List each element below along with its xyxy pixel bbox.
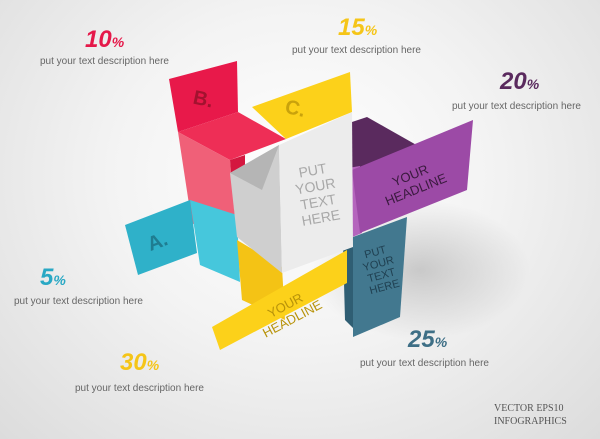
yellow bottom block <box>212 240 347 350</box>
text: 20% <box>500 68 539 95</box>
stat 15% <box>292 14 421 56</box>
text: put your text description here <box>360 358 489 369</box>
purple block: YOUR <box>390 161 430 189</box>
white center box: YOUR <box>294 175 337 197</box>
red block B <box>169 61 286 224</box>
yellow C panel <box>252 72 352 139</box>
stat 25% <box>360 326 489 369</box>
text: 30% <box>120 349 159 376</box>
cyan block A: A. <box>144 228 171 256</box>
stat 5% <box>14 264 143 307</box>
footer label <box>494 403 567 427</box>
purple block: HEADLINE <box>383 170 449 209</box>
yellow bottom block: YOUR <box>265 290 305 321</box>
red block B: B. <box>191 87 215 112</box>
text: put your text description here <box>292 45 421 56</box>
white center box: HERE <box>300 206 341 229</box>
text: 10% <box>85 26 124 53</box>
yellow bottom block: HEADLINE <box>260 297 325 341</box>
stat 20% <box>452 68 581 112</box>
stat 10% <box>40 26 169 67</box>
teal block: HERE <box>368 278 401 297</box>
yellow C panel: C. <box>283 96 307 122</box>
text: 25% <box>408 326 447 353</box>
purple block <box>348 117 473 238</box>
stat 30% <box>75 349 204 394</box>
cyan block A <box>125 200 240 282</box>
footer label: INFOGRAPHICS <box>494 416 567 427</box>
text: put your text description here <box>75 383 204 394</box>
text: 5% <box>40 264 66 291</box>
teal block: TEXT <box>366 266 397 285</box>
teal block: YOUR <box>362 254 395 274</box>
text: 15% <box>338 14 377 41</box>
white center box: PUT <box>297 160 328 181</box>
text: put your text description here <box>452 101 581 112</box>
text: put your text description here <box>40 56 169 67</box>
white center box: TEXT <box>299 191 338 213</box>
teal block: PUT <box>363 244 388 261</box>
footer label: VECTOR EPS10 <box>494 403 564 414</box>
shadow <box>310 200 530 340</box>
teal block <box>343 217 407 337</box>
white center box <box>230 112 353 273</box>
text: put your text description here <box>14 296 143 307</box>
